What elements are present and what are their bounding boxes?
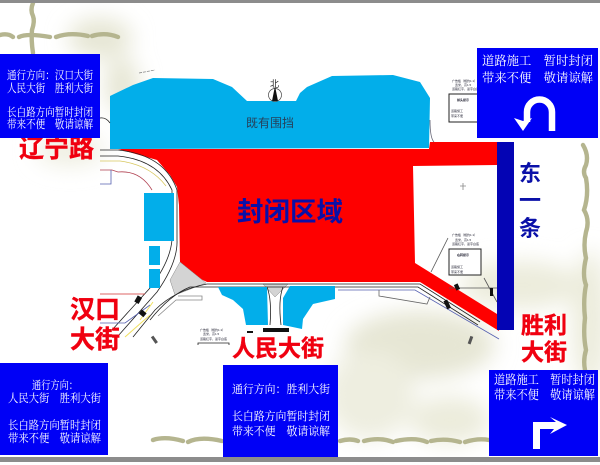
- sign: bottom left notice: [0, 363, 108, 455]
- small sign diagram east: 带来不便: [451, 269, 463, 274]
- small sign diagram east: 道路施工: [451, 264, 463, 269]
- sign: bottom centre notice: [223, 365, 338, 457]
- sign: top right U-turn: 带来不便 敬请谅解: [482, 70, 593, 85]
- sign: top left notice: [0, 54, 100, 138]
- cyan block: south left: [218, 287, 268, 325]
- small sign diagram south: 道路红字，蓝字白底: [200, 336, 227, 341]
- label: closed zone: 封闭区域: [237, 197, 343, 227]
- road markers: [134, 283, 493, 344]
- cyan block: west large: [144, 193, 174, 241]
- sign: bottom right turn: [489, 370, 598, 456]
- road network lines: [100, 70, 499, 339]
- small sign diagram north east: 带来不便: [451, 113, 463, 118]
- sign: bottom centre notice: 通行方向：胜利大街: [232, 382, 330, 396]
- small sign diagram east: 广告板（幅约1:1）: [452, 232, 477, 237]
- label: East First Street: 东: [519, 161, 541, 186]
- label: Hankou Street: 大街: [70, 326, 120, 354]
- sign: bottom left notice: 人民大街 胜利大街: [8, 391, 101, 405]
- label: East First Street: 一: [519, 188, 541, 213]
- icon: north arrow: [268, 79, 282, 102]
- sign: top left notice: 带来不便 敬请谅解: [7, 117, 93, 131]
- small sign diagram east: 宽米，高1.5: [455, 237, 472, 242]
- small sign diagram south: [198, 327, 229, 345]
- small sign diagram east: 道路红字，蓝字白底: [452, 241, 479, 246]
- small sign diagram east: [449, 232, 481, 275]
- sign: top right U-turn: 道路施工 暂时封闭: [482, 53, 593, 68]
- sign: top left notice: 人民大街 胜利大街: [7, 81, 93, 95]
- east first street bar: [497, 142, 514, 330]
- hatched junction west: [170, 262, 206, 295]
- sign: top left notice: 长白路方向暂时封闭: [7, 105, 93, 119]
- cyan block: west small upper: [149, 246, 160, 265]
- sign: bottom centre notice: 长白路方向暂时封闭: [232, 409, 330, 423]
- sign: bottom left notice: 长白路方向暂时封闭: [8, 418, 101, 432]
- small sign diagram north east: 掉头提示: [457, 97, 469, 102]
- label: Shengli Street: [521, 312, 567, 365]
- label: East First Street: 条: [519, 216, 541, 241]
- small sign diagram south: 宽米，高1.5: [203, 331, 220, 336]
- cyan block: south right: [283, 286, 335, 329]
- small sign diagram south: 广告板（幅约1:1）: [200, 327, 225, 332]
- label: East First Street: [519, 161, 541, 241]
- small sign diagram north east: [449, 78, 479, 122]
- small sign diagram north east: 宽米，高1.5: [455, 82, 472, 87]
- small sign diagram north east: 广告板（幅约1:1）: [452, 78, 477, 83]
- sign: bottom left notice: 通行方向：: [32, 378, 78, 392]
- sign: bottom centre notice: 带来不便 敬请谅解: [232, 424, 330, 438]
- label: Hankou Street: 汉口: [70, 296, 120, 324]
- icon: U-turn arrow: [514, 100, 552, 131]
- label: Liaoning Road: 辽宁路: [19, 135, 94, 163]
- small sign diagram east: 右转提示: [457, 252, 469, 257]
- sign: bottom left notice: 带来不便 敬请谅解: [8, 431, 101, 445]
- label: existing hoarding: 既有围挡: [246, 116, 294, 130]
- icon: right turn arrow: [533, 417, 567, 449]
- sign: top right U-turn: [477, 48, 598, 138]
- label: Hankou Street: [70, 296, 120, 354]
- hatched junction south: [263, 284, 288, 297]
- label: Renmin Street: 人民大街: [232, 335, 324, 361]
- cyan area: existing hoarding: [110, 75, 430, 149]
- top grey bar: [0, 0, 600, 3]
- cyan block: west small lower: [149, 269, 160, 288]
- small sign diagram north east: 道路红字，蓝字白底: [452, 86, 479, 91]
- label: Shengli Street: 胜利: [521, 312, 567, 338]
- small sign diagram north east: 道路施工: [451, 108, 463, 113]
- bottom grey bar: [0, 457, 600, 462]
- label: Shengli Street: 大街: [521, 339, 567, 365]
- red closed zone: [118, 142, 499, 331]
- icon: north arrow: 北: [270, 79, 279, 89]
- sign: top left notice: 通行方向：汉口大街: [7, 68, 93, 82]
